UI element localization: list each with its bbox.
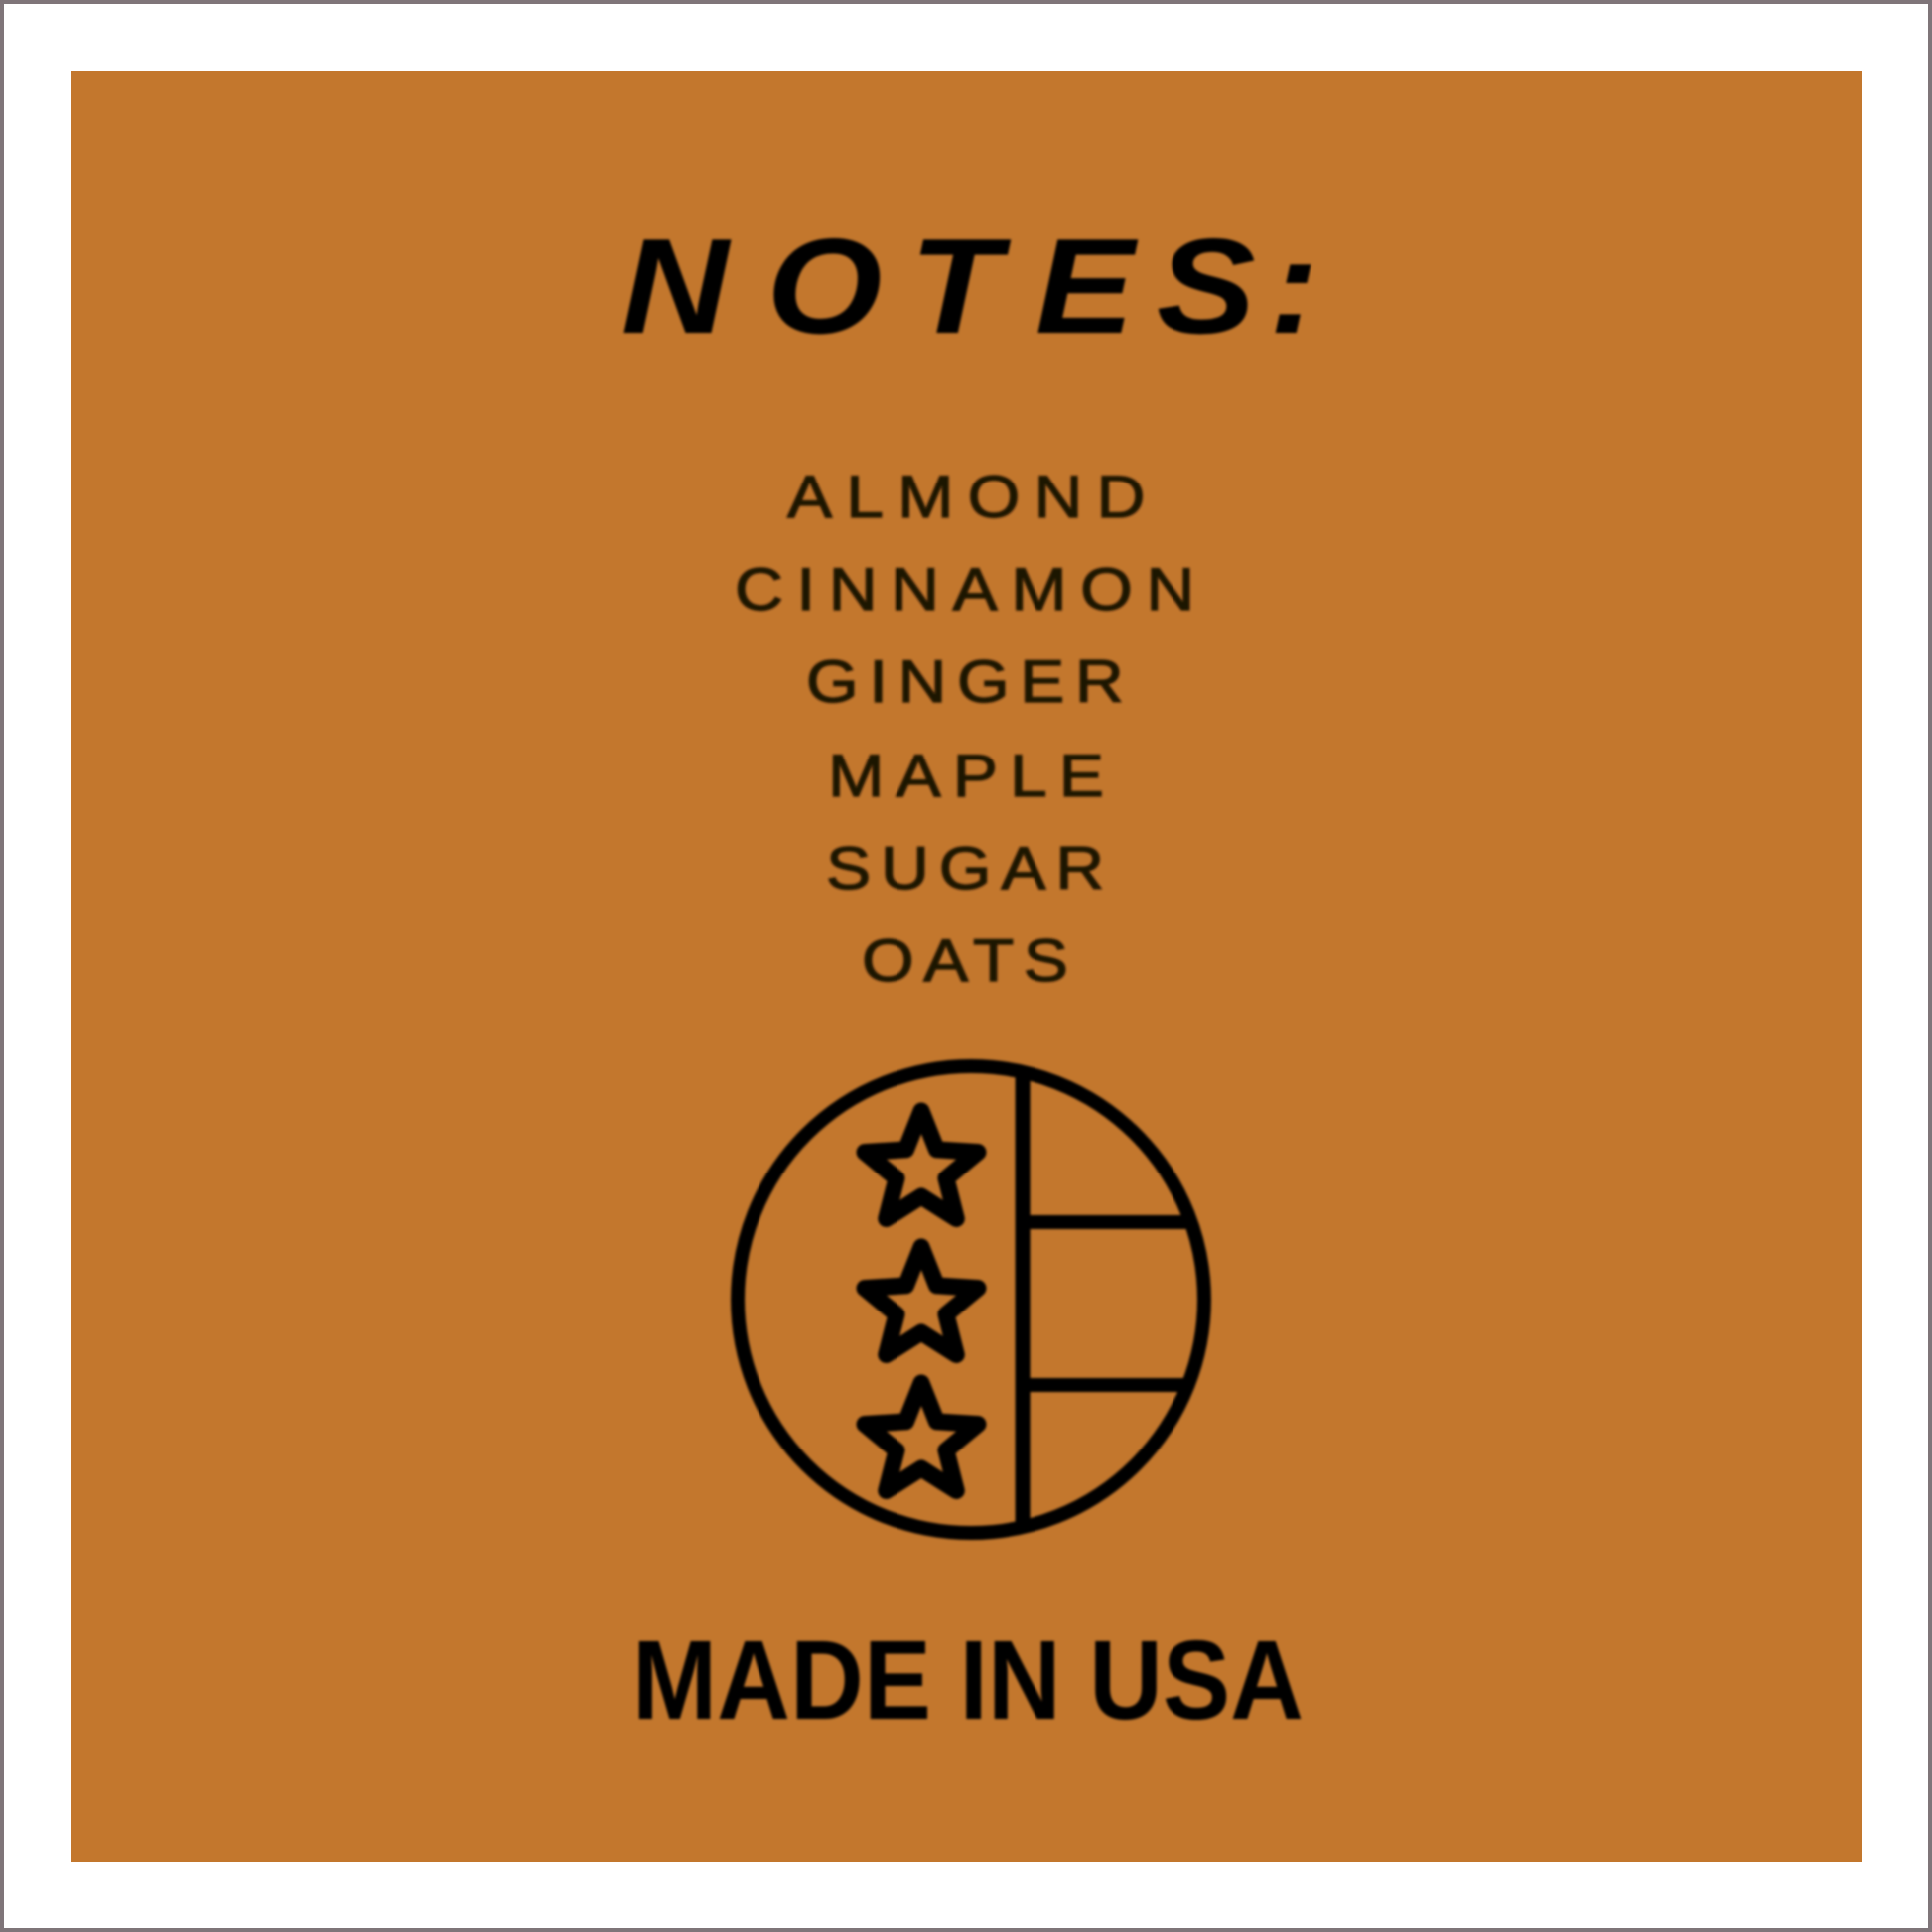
- text block: flavor notes list: [735, 464, 1194, 994]
- text block: flavor notes list: ALMOND: [787, 464, 1145, 530]
- text block: flavor notes list: MAPLE: [828, 743, 1104, 809]
- text block: flavor notes list: GINGER: [806, 648, 1124, 715]
- icon: American flag circle: [738, 1066, 1204, 1533]
- title: notes: NOTES:: [621, 211, 1318, 361]
- text block: flavor notes list: CINNAMON: [735, 556, 1194, 622]
- text block: flavor notes list: SUGAR: [826, 835, 1104, 901]
- caption: made in USA: MADE IN USA: [632, 1617, 1304, 1742]
- text block: flavor notes list: OATS: [862, 927, 1068, 994]
